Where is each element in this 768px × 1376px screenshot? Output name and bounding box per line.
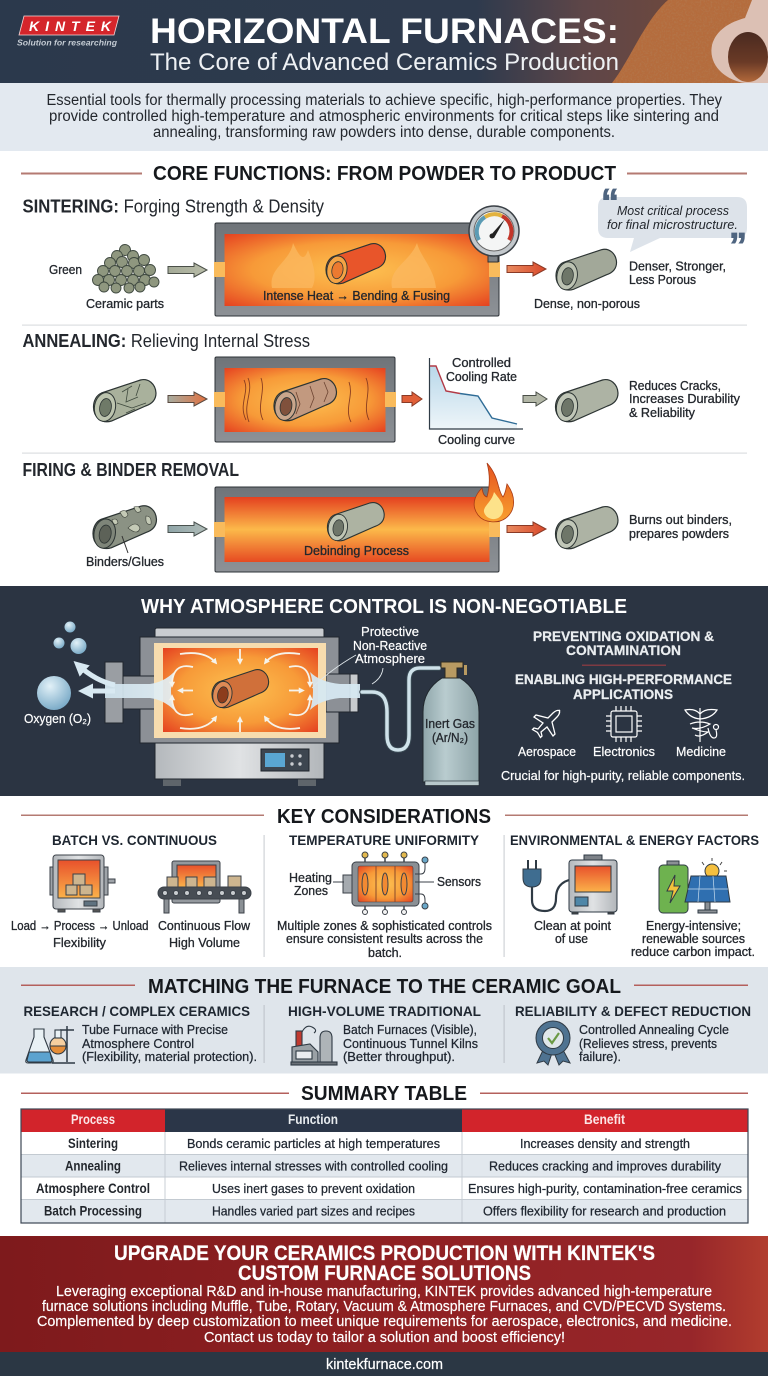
research column: (Flexibility, material protection). <box>82 1050 257 1064</box>
result text: Burns out binders, <box>629 513 732 527</box>
furnace <box>214 357 396 442</box>
icon: battery and solar <box>659 858 730 913</box>
arrow <box>523 392 547 406</box>
result text: Increases Durability <box>629 392 741 406</box>
logo: Solution for researching <box>17 38 117 48</box>
icon: chip <box>606 706 642 742</box>
panel: batch vs continuous <box>11 832 251 950</box>
label: ceramic parts: Ceramic parts <box>86 297 164 311</box>
high volume column: Continuous Tunnel Kilns <box>343 1037 478 1051</box>
reliability column: failure). <box>579 1050 621 1064</box>
row: atmosphere control: Ensures high-purity, contamination-free ceramics <box>468 1182 742 1196</box>
oxidation heading <box>533 628 714 658</box>
caption: Debinding Process <box>304 544 409 558</box>
reliability column: RELIABILITY & DEFECT REDUCTION <box>515 1003 751 1019</box>
reliability column: (Relieves stress, prevents <box>579 1037 717 1051</box>
table header <box>71 1111 625 1127</box>
arrow <box>168 522 207 536</box>
footer: kintekfurnace.com <box>326 1356 443 1373</box>
caption: High Volume <box>169 936 240 950</box>
cooling curve chart: Cooling Rate <box>446 370 517 384</box>
callout: Most critical process <box>617 204 729 218</box>
callout <box>598 181 747 266</box>
icon: plug and electric furnace <box>523 855 617 914</box>
callout: for final microstructure. <box>607 218 738 232</box>
research column: RESEARCH / COMPLEX CERAMICS <box>24 1003 250 1019</box>
reliability column: Controlled Annealing Cycle <box>579 1023 729 1037</box>
oxidation heading: CONTAMINATION <box>566 642 681 658</box>
table header: Process <box>71 1111 115 1127</box>
cta heading: UPGRADE YOUR CERAMICS PRODUCTION WITH KINTEK'S <box>114 1242 655 1265</box>
icon labels: Electronics <box>593 745 655 759</box>
research column: Tube Furnace with Precise <box>82 1023 228 1037</box>
title: HORIZONTAL FURNACES: <box>150 12 619 51</box>
cta body: Contact us today to tailor a solution and boost efficiency! <box>204 1329 565 1346</box>
labels: Zones <box>294 884 328 898</box>
panel: firing and binder removal <box>22 460 732 572</box>
cracked tube <box>92 380 156 423</box>
caption: reduce carbon impact. <box>631 945 755 959</box>
icon: flask <box>26 1026 75 1063</box>
cta heading: CUSTOM FURNACE SOLUTIONS <box>238 1262 531 1285</box>
cta body: furnace solutions including Muffle, Tube, Rotary, Vacuum & Atmosphere Furnaces, and CVD/PECVD Systems. <box>42 1298 726 1315</box>
glowing tube <box>325 244 386 285</box>
control panel <box>261 749 309 771</box>
inert gas cylinder <box>423 662 479 786</box>
gas stream <box>105 672 174 710</box>
oxygen bubbles <box>37 622 86 710</box>
row: annealing <box>65 1158 722 1174</box>
row: annealing: Relieves internal stresses with controlled cooling <box>179 1160 448 1174</box>
heading: summary table: SUMMARY TABLE <box>301 1083 467 1105</box>
high volume column: HIGH-VOLUME TRADITIONAL <box>288 1003 481 1019</box>
furnace caption: Intense Heat → Bending & Fusing <box>263 289 450 303</box>
icon: conveyor furnace <box>158 861 251 913</box>
arrow <box>507 522 546 536</box>
high volume column <box>288 1003 481 1065</box>
firing heading: FIRING & BINDER REMOVAL <box>22 460 239 480</box>
icon: quality badge <box>536 1021 570 1065</box>
subheading: BATCH VS. CONTINUOUS <box>52 832 217 848</box>
panel: annealing <box>22 331 741 447</box>
caption: of use <box>555 932 588 946</box>
icon: heating zones device <box>333 852 434 914</box>
icon: batch furnace <box>50 855 115 912</box>
caption <box>534 919 755 959</box>
row: atmosphere control: Uses inert gases to prevent oxidation <box>212 1182 415 1196</box>
intro band: provide controlled high-temperature and atmospheric environments for critical steps like sintering and <box>49 108 719 125</box>
reliability column <box>515 1003 751 1065</box>
intro band: Essential tools for thermally processing materials to achieve specific, high-performance properties. They <box>46 92 722 109</box>
heading: key considerations: KEY CONSIDERATIONS <box>277 806 491 828</box>
cta body <box>37 1283 732 1346</box>
result text: Reduces Cracks, <box>629 379 721 393</box>
panel: matching the furnace to the goal <box>0 967 768 1074</box>
row: sintering: Bonds ceramic particles at high temperatures <box>187 1137 440 1151</box>
flow arrows <box>172 649 310 732</box>
flames <box>272 243 436 288</box>
protective atmosphere label <box>312 625 427 688</box>
row: batch processing: Offers flexibility for research and production <box>483 1204 726 1218</box>
arrow <box>168 392 207 406</box>
subtitle: The Core of Advanced Ceramics Production <box>150 49 619 76</box>
stress waves <box>243 378 369 422</box>
oxygen label: Oxygen (O₂) <box>24 712 91 726</box>
header image: ceramic powder and tube <box>612 0 768 83</box>
cooling curve chart: Cooling curve <box>438 433 515 447</box>
note: Crucial for high-purity, reliable components. <box>501 769 745 783</box>
dense tube <box>555 249 617 291</box>
panel: temperature uniformity <box>277 832 492 960</box>
call to action band <box>0 1236 768 1352</box>
row: atmosphere control: Atmosphere Control <box>36 1180 150 1196</box>
icon labels: Aerospace <box>518 745 576 759</box>
oxidation heading: PREVENTING OXIDATION & <box>533 628 714 644</box>
row: atmosphere control <box>36 1180 742 1196</box>
subheading: TEMPERATURE UNIFORMITY <box>289 832 480 848</box>
caption: Multiple zones & sophisticated controls <box>277 919 492 933</box>
panel: environmental and energy <box>510 832 759 959</box>
result text <box>629 379 741 420</box>
row: annealing: Annealing <box>65 1158 121 1174</box>
caption: Load → Process → Unload <box>11 919 149 933</box>
caption: Energy-intensive; <box>646 919 741 933</box>
labels <box>289 871 481 898</box>
furnace cross-section <box>105 628 360 786</box>
intro band <box>0 83 768 151</box>
cta heading <box>114 1242 655 1285</box>
row: batch processing: Batch Processing <box>44 1202 142 1218</box>
high volume column: (Better throughput). <box>343 1050 455 1064</box>
flame icon <box>474 463 514 522</box>
logo: KINTEK <box>29 18 112 34</box>
caption: batch. <box>368 946 402 960</box>
logo <box>17 16 119 48</box>
row: sintering: Increases density and strength <box>520 1137 690 1151</box>
callout: “ <box>601 181 619 222</box>
caption: Flexibility <box>53 936 107 950</box>
row: annealing: Reduces cracking and improves durability <box>489 1160 722 1174</box>
green ceramic particle pile <box>92 244 159 293</box>
research column: Atmosphere Control <box>82 1037 194 1051</box>
labels: Heating <box>289 871 332 885</box>
row: batch processing: Handles varied part sizes and recipes <box>212 1204 415 1218</box>
applications heading: ENABLING HIGH-PERFORMANCE <box>515 671 732 687</box>
row: sintering: Sintering <box>68 1135 118 1151</box>
heading: core functions: CORE FUNCTIONS: FROM POWDER TO PRODUCT <box>153 163 616 185</box>
label: binders: Binders/Glues <box>86 555 164 569</box>
result text: & Reliability <box>629 406 696 420</box>
table header: Function <box>288 1111 338 1127</box>
sintering heading: SINTERING: Forging Strength & Density <box>22 196 324 216</box>
labels: Sensors <box>437 875 481 889</box>
panel: sintering <box>22 181 747 316</box>
result text: Denser, Stronger, <box>629 260 726 274</box>
intro band: annealing, transforming raw powders into dense, durable components. <box>153 124 615 141</box>
caption: Continuous Flow <box>158 919 251 933</box>
stressed tube <box>273 379 336 422</box>
label: dense: Dense, non-porous <box>534 297 640 311</box>
icon labels: Medicine <box>676 745 726 759</box>
cta body: Complemented by deep customization to meet unique requirements for aerospace, electronics, and medicine. <box>37 1313 732 1330</box>
header banner <box>0 0 768 83</box>
result text: prepares powders <box>629 527 729 541</box>
caption <box>11 919 251 950</box>
cta body: Leveraging exceptional R&D and in-house manufacturing, KINTEK provides advanced high-temperature <box>56 1283 712 1300</box>
arrow <box>168 263 207 277</box>
table header: Benefit <box>584 1111 625 1127</box>
icon: factory <box>291 1026 337 1065</box>
protective atmosphere label: Non-Reactive <box>353 639 427 653</box>
callout: ” <box>729 225 747 266</box>
gas hose <box>362 668 439 750</box>
caption <box>277 919 492 960</box>
tube <box>326 503 384 542</box>
summary table <box>21 1109 748 1223</box>
annealing heading: ANNEALING: Relieving Internal Stress <box>22 331 310 351</box>
temperature gauge <box>469 206 519 262</box>
arrow <box>402 392 422 406</box>
applications heading <box>515 671 732 702</box>
result text <box>629 513 732 541</box>
applications heading: APPLICATIONS <box>573 686 673 702</box>
caption: ensure consistent results across the <box>286 932 483 946</box>
footer <box>0 1352 768 1376</box>
heading: MATCHING THE FURNACE TO THE CERAMIC GOAL <box>148 976 621 998</box>
icon: medical caduceus <box>685 708 718 742</box>
icon: airplane <box>532 710 560 738</box>
inert gas cylinder: (Ar/N₂) <box>432 731 468 745</box>
row: sintering <box>68 1135 690 1151</box>
protective atmosphere label: Protective <box>361 625 419 639</box>
output arrow <box>507 262 546 276</box>
caption: Clean at point <box>534 919 612 933</box>
binder tube <box>92 506 156 553</box>
research column <box>24 1003 257 1064</box>
panel: atmosphere control <box>0 586 768 796</box>
furnace <box>214 223 500 316</box>
caption: renewable sources <box>642 932 745 946</box>
cooling curve chart <box>430 356 523 447</box>
cooling curve chart: Controlled <box>452 356 511 370</box>
protective atmosphere label: Atmosphere <box>355 652 425 666</box>
row: batch processing <box>44 1202 726 1218</box>
result tube <box>554 380 618 423</box>
heading: WHY ATMOSPHERE CONTROL IS NON-NEGOTIABLE <box>141 596 627 618</box>
outflow arrows <box>78 665 115 691</box>
label: green: Green <box>49 263 82 277</box>
copper tube <box>211 670 269 709</box>
result tube <box>554 507 618 550</box>
result text: Less Porous <box>629 273 696 287</box>
inert gas cylinder: Inert Gas <box>425 717 475 731</box>
high volume column: Batch Furnaces (Visible), <box>343 1023 477 1037</box>
furnace <box>214 487 500 572</box>
result text <box>629 260 726 287</box>
icon labels <box>518 745 726 759</box>
